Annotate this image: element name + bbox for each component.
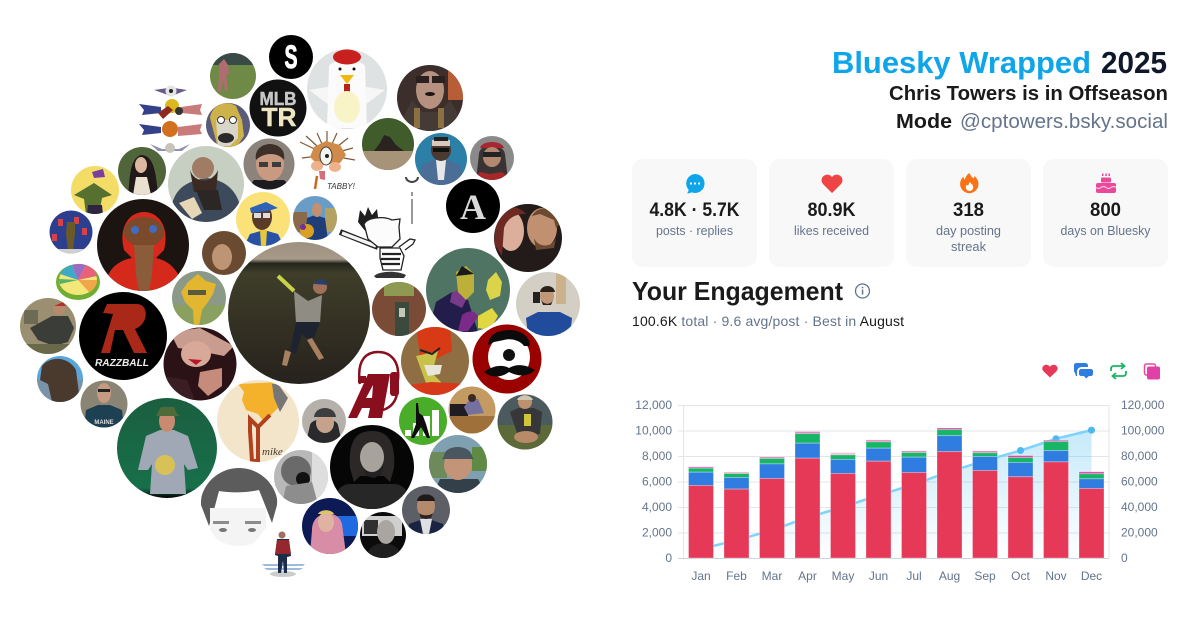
- bar: Jan: [688, 467, 714, 558]
- avatar: S logo: S: [284, 39, 298, 75]
- avatar: man with cat: [168, 146, 244, 222]
- avatar: purple villain with yellow hand: [426, 248, 510, 332]
- avatar: Maine jersey man: MAINE: [94, 420, 114, 426]
- icon: heart: [822, 175, 842, 192]
- avatar: woman with red lips: [163, 327, 237, 401]
- month labels: Dec: [1081, 569, 1102, 583]
- stat card: days on Bluesky: [1043, 159, 1168, 267]
- legend icon: reposts: [1111, 363, 1126, 379]
- avatar: MLB TR logo: [250, 80, 306, 136]
- avatar: batting cartoon boy: [340, 177, 418, 278]
- avatar: suited cartoon reporter: [415, 133, 467, 185]
- right axis labels: [1121, 398, 1165, 565]
- icon: info: [856, 284, 870, 298]
- right axis labels: 40,000: [1121, 500, 1158, 514]
- month labels: Aug: [939, 569, 960, 583]
- right axis labels: 100,000: [1121, 424, 1165, 438]
- avatar: man crouching on grass: [497, 394, 553, 450]
- avatar: yellow background figure: [71, 166, 119, 215]
- stat card: posting streak: 318: [953, 200, 984, 221]
- month labels: Oct: [1011, 569, 1030, 583]
- right axis labels: 80,000: [1121, 449, 1158, 463]
- stat card: posts and replies: posts · replies: [656, 223, 733, 238]
- bar: Feb: [724, 472, 749, 558]
- title: 2025: [1101, 45, 1167, 80]
- avatar: tabby cartoon: TABBY!: [327, 182, 356, 191]
- legend icon: likes: [1042, 365, 1058, 378]
- bar: Jun: [866, 440, 891, 558]
- stat card: posting streak: day posting: [936, 223, 1001, 238]
- avatar: S logo: [269, 35, 313, 79]
- bar: Jul: [902, 451, 926, 558]
- month labels: Jan: [691, 569, 711, 583]
- avatar: man at computer: [20, 298, 76, 354]
- avatar: cartoon man in blue cap: [236, 192, 290, 246]
- avatar: cartoon Mike: mike: [262, 446, 283, 458]
- avatar: Razzball logo: [79, 292, 167, 380]
- bar: Dec: [1079, 472, 1104, 558]
- avatar: red coat figure: [262, 532, 305, 577]
- bar: Aug: [937, 428, 962, 558]
- avatar: NBA trophy backdrop: [49, 210, 93, 255]
- avatar: mirror selfie blue tee: [516, 272, 580, 336]
- avatar: red bird cartoon: [401, 327, 469, 396]
- chart: monthly engagement: [635, 398, 1165, 583]
- avatar: man with glasses: [243, 138, 295, 190]
- month labels: Jul: [906, 569, 922, 583]
- avatar: man in cap outdoors: [429, 435, 487, 493]
- avatar: photographer: [274, 450, 328, 504]
- right axis labels: 120,000: [1121, 398, 1165, 412]
- avatar: MLB TR logo: TR: [262, 102, 297, 132]
- stat card: days on Bluesky: 800: [1090, 200, 1121, 221]
- avatar: cartoon Mike: [217, 380, 299, 462]
- avatar: MLB TR logo: MLB: [260, 89, 296, 109]
- stat card: posting streak: streak: [951, 239, 986, 254]
- legend icon: quotes: [1144, 364, 1160, 380]
- stat card: posts and replies: 4.8K · 5.7K: [650, 200, 740, 221]
- bar: May: [830, 453, 856, 558]
- avatar: pitcher with green background: [117, 398, 217, 498]
- right axis labels: 0: [1121, 551, 1128, 565]
- month labels: Jun: [869, 569, 888, 583]
- icon: flame: [960, 173, 978, 193]
- avatar: man in red hood: [470, 136, 514, 180]
- avatar: Maine jersey man: [80, 380, 128, 428]
- bar: Sep: [972, 451, 998, 558]
- heading: Your Engagement: Your Engagement: [632, 276, 843, 306]
- icon: cake: [1096, 174, 1116, 193]
- avatar: couple: [494, 204, 562, 272]
- avatar: shop door: [372, 282, 426, 336]
- title: Bluesky Wrapped: [832, 45, 1091, 80]
- month labels: May: [832, 569, 854, 583]
- cumulative area line: [701, 427, 1095, 558]
- month labels: Apr: [798, 569, 817, 583]
- left axis labels: 10,000: [635, 424, 672, 438]
- avatar: bearded man black and white: [330, 425, 414, 510]
- left axis labels: 8,000: [642, 449, 672, 463]
- avatar: man smiling black and white: [360, 512, 406, 558]
- avatar: A logo: [446, 179, 500, 233]
- left axis labels: 2,000: [642, 526, 672, 540]
- avatar: Razzball logo: RAZZBALL: [95, 357, 149, 369]
- subtitle: name and handle: Mode: [896, 110, 952, 133]
- month labels: Nov: [1045, 569, 1067, 583]
- avatar: sports banners: [139, 86, 202, 153]
- bar: Nov: [1044, 440, 1068, 558]
- stat card: likes: 80.9K: [808, 200, 856, 221]
- month labels: Sep: [974, 569, 996, 583]
- month labels: [691, 569, 1102, 583]
- month labels: Mar: [762, 569, 782, 583]
- avatar: flowers man: [293, 196, 337, 240]
- chart grid: [678, 405, 1109, 558]
- stat card: posting streak: [906, 159, 1031, 267]
- avatar: dog on wall: [362, 118, 414, 170]
- avatar: maroon headset A logo: [348, 352, 399, 418]
- avatar bubble cluster: [20, 35, 580, 577]
- stacked bars: [688, 428, 1104, 558]
- avatar: tabby cartoon: [300, 131, 356, 191]
- bar: Oct: [1008, 456, 1033, 558]
- engagement summary: 100.6K total · 9.6 avg/post · Best in August: [632, 313, 904, 329]
- legend: [1042, 363, 1160, 380]
- legend icon: replies: [1074, 363, 1093, 378]
- month labels: Feb: [726, 569, 747, 583]
- avatar: mustache mascot: [472, 324, 542, 394]
- stat card: likes: likes received: [794, 223, 869, 238]
- right axis labels: 60,000: [1121, 474, 1158, 488]
- subtitle: name and handle: [889, 82, 1168, 133]
- avatar: red hoodie alien: [97, 199, 189, 291]
- avatar: sepia long hair: [202, 231, 246, 275]
- left axis labels: 12,000: [635, 398, 672, 412]
- avatar: man at desk: [448, 386, 496, 434]
- left axis labels: 0: [665, 551, 672, 565]
- bar: Mar: [760, 457, 784, 558]
- avatar: pink haired woman: [302, 498, 358, 554]
- avatar: citrus color wheel: [56, 264, 100, 300]
- right axis labels: 20,000: [1121, 526, 1158, 540]
- avatar: goth woman with glasses: [397, 65, 463, 132]
- left axis labels: [635, 398, 672, 565]
- avatar: woman in beanie: [302, 399, 346, 443]
- avatar: girl on grass field: [210, 53, 256, 99]
- left axis labels: 4,000: [642, 500, 672, 514]
- avatar: smiling man in suit: [402, 486, 450, 534]
- stat card: days on Bluesky: days on Bluesky: [1060, 223, 1151, 238]
- stat card: likes: [769, 159, 894, 267]
- subtitle: name and handle: Chris Towers is in Offseason: [889, 82, 1168, 105]
- subtitle: name and handle: @cptowers.bsky.social: [960, 110, 1168, 133]
- icon: chat bubble: [686, 174, 705, 193]
- avatar: A logo: A: [460, 187, 486, 227]
- avatar: hair sketch portrait: [201, 468, 277, 546]
- avatar: brown dog: [37, 356, 83, 402]
- avatar: chicken puppet: [307, 49, 387, 129]
- avatar: cartoon with glasses: [206, 103, 250, 148]
- stat card: posts and replies: [632, 159, 757, 267]
- avatar: batter in field: [228, 242, 370, 384]
- bar: Apr: [795, 432, 820, 558]
- avatar: green batter logo: [399, 397, 447, 445]
- avatar: woman with dark hair: [118, 147, 166, 195]
- avatar: yellow sun mascot: [172, 271, 226, 326]
- left axis labels: 6,000: [642, 474, 672, 488]
